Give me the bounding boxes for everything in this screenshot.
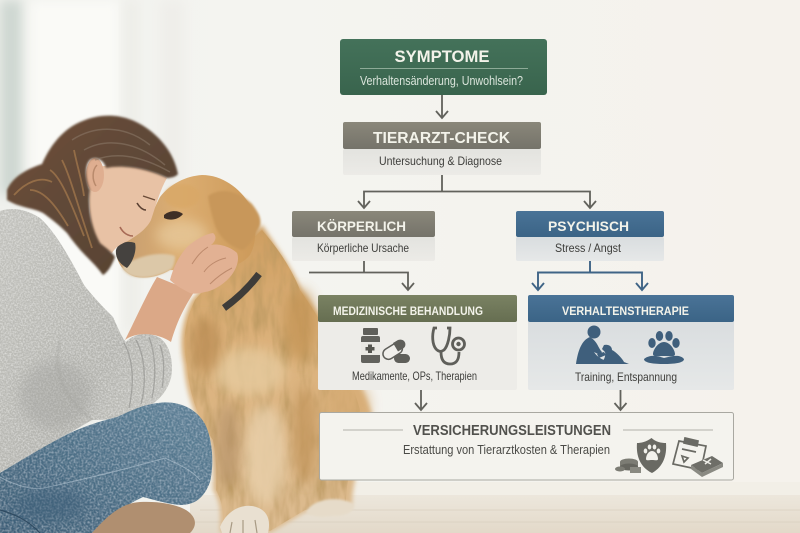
text: Erstattung: Erstattung von Tierarztkosten & Therapien [403,443,610,457]
text: Körperliche Ursache: Körperliche Ursache [317,241,409,255]
woman face [86,158,167,253]
panel: Verhaltenstherapie [528,295,734,390]
heading: Symptome: SYMPTOME [394,48,490,66]
dog body [182,225,372,533]
text: Stress / Angst: Stress / Angst [555,241,622,255]
dog ear [208,191,261,250]
paw front [220,506,269,533]
panel: Medizinische Behandlung [318,295,517,390]
woman back and sweater [0,209,172,473]
arrow: Symptome to Tierarzt-Check [436,95,448,118]
forearm [125,277,194,342]
heading: Medizinische Behandlung: MEDIZINISCHE BEHANDLUNG [333,304,483,318]
icon: shield with paw [637,438,666,473]
jeans [0,402,212,533]
icon: coins [615,458,641,473]
arrow: split to Körperlich and Psychisch [358,175,596,208]
icon: clipboard [673,438,706,470]
foot in slipper [92,502,195,533]
woman hair [7,116,178,275]
heading: Tierarzt-Check: TIERARZT-CHECK [373,130,511,147]
heading: Psychisch: PSYCHISCH [548,218,629,234]
hand on dog [170,233,238,294]
dog eye [164,211,183,220]
icon: paw on meditation pose [644,331,684,364]
heading: Verhaltenstherapie: VERHALTENSTHERAPIE [562,304,689,318]
text: Training, Entspannung: Training, Entspannung [575,370,677,384]
icon: stethoscope [433,328,464,364]
arrow: Psychisch to Verhaltenstherapie [532,261,648,290]
panel: Tierarzt-Check [343,122,541,175]
arrow: Verhaltenstherapie to Versicherungsleistungen [614,390,626,410]
paw back [306,499,354,517]
text: Medikamente, OPs, Therapien: Medikamente, OPs, Therapien [352,369,477,383]
panel: Psychisch [516,211,664,261]
text: Untersuchung und Diagnose: Untersuchung & Diagnose [379,154,502,168]
text: Symptome subtitle: Verhaltensänderung, Unwohlsein? [360,74,523,88]
photo: woman hugging golden retriever [0,116,372,533]
icon: medicine bottle and pills [361,328,410,363]
panel: Körperlich [292,211,435,261]
heading: Versicherungsleistungen: VERSICHERUNGSLEISTUNGEN [413,423,611,439]
icon: banknotes [691,456,723,477]
panel: Versicherungsleistungen [320,412,734,480]
panel: Symptome [340,39,547,95]
dog nose [116,242,136,268]
dog head and ear [116,175,261,278]
floor [190,482,800,533]
arrow: Körperlich to medizinische Behandlung [309,261,414,290]
icon: person training dog [576,326,629,364]
heading: Körperlich: KÖRPERLICH [317,218,406,234]
arrow: medizinische Behandlung to Versicherungsleistungen [415,390,427,410]
dog collar [224,274,259,308]
